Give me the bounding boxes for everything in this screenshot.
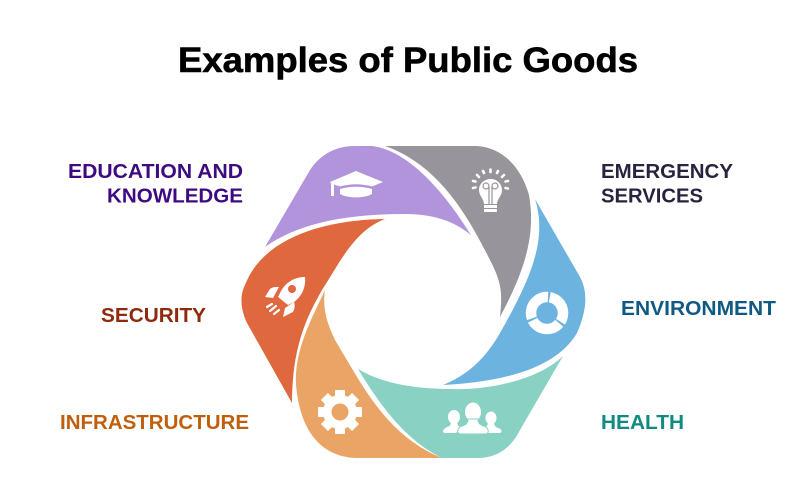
segment: security (red-orange) <box>241 219 385 403</box>
label: emergency services: SERVICES <box>601 186 703 208</box>
label: emergency services: EMERGENCY <box>601 161 734 183</box>
icon: rocket <box>265 277 305 317</box>
label: emergency services <box>601 161 734 208</box>
segment: environment (blue) <box>443 199 585 385</box>
segment: emergency services (gray) <box>385 146 531 317</box>
label: education and knowledge: EDUCATION AND <box>68 161 243 183</box>
label: health: HEALTH <box>601 412 684 434</box>
segment: infrastructure (orange) <box>296 290 442 458</box>
icon: gear <box>318 390 362 434</box>
title: Examples of Public Goods <box>178 41 638 80</box>
icon: graduation cap <box>330 171 383 197</box>
label: security: SECURITY <box>101 305 207 327</box>
icon: light bulb <box>473 170 508 212</box>
icon: people <box>443 402 502 434</box>
label: education and knowledge: KNOWLEDGE <box>107 186 243 208</box>
label: infrastructure: INFRASTRUCTURE <box>60 412 249 434</box>
label: education and knowledge <box>68 161 243 208</box>
segment: health (teal) <box>358 356 563 458</box>
icon: recycle loop <box>528 294 566 332</box>
label: environment: ENVIRONMENT <box>621 298 776 320</box>
segment: education (purple) <box>265 146 471 247</box>
